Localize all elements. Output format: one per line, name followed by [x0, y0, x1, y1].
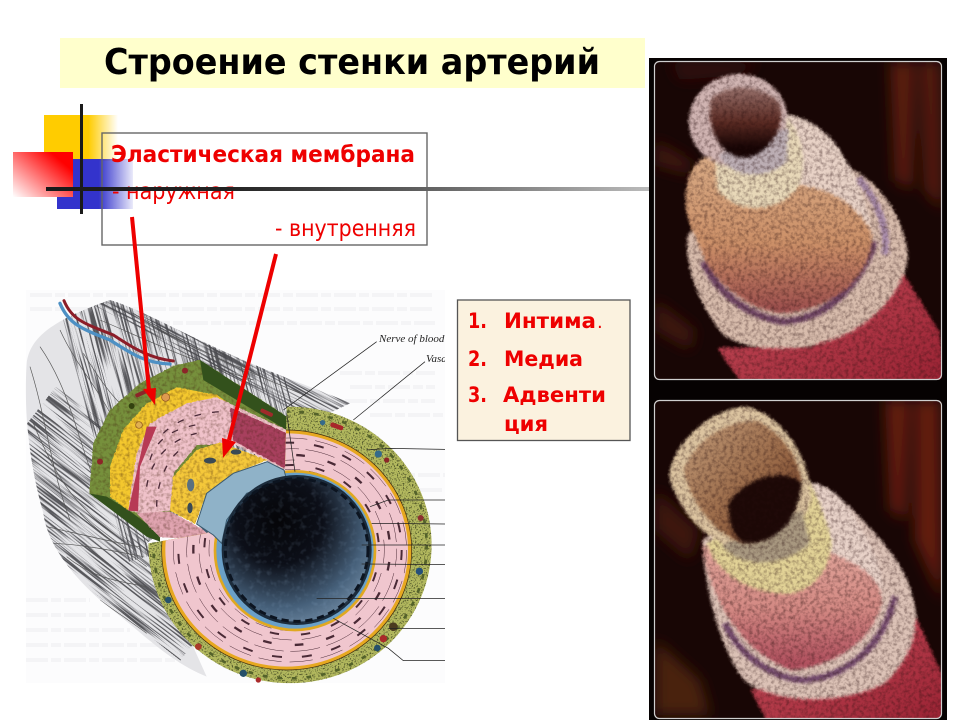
- diagram labels: Nerve of blood: [378, 333, 445, 345]
- intima base behind lumen: [197, 470, 300, 557]
- cut face of media: [137, 512, 211, 538]
- leader lines: [283, 342, 445, 661]
- arrow: inner membrane: [222, 254, 276, 458]
- faint scanned page background: [26, 290, 445, 683]
- diagram labels: Vasa: [426, 353, 447, 365]
- media: [165, 433, 408, 667]
- adventitia band: [703, 483, 915, 699]
- callout: elastic membrane: Эластическая мембрана: [111, 142, 415, 168]
- dark background: [654, 61, 942, 380]
- red outer vessel: [752, 617, 945, 720]
- legend: wall layers: 3.: [468, 383, 487, 407]
- front ring wedge: [147, 403, 437, 687]
- legend: wall layers: .: [597, 312, 603, 333]
- connective tissue fibres: [26, 300, 350, 676]
- small vessel: [60, 301, 173, 364]
- legend: wall layers: Медиа: [504, 347, 583, 371]
- lip: [670, 407, 812, 547]
- back ring: inner yellow membrane: [170, 443, 267, 524]
- legend: wall layers: Интима: [504, 309, 596, 333]
- lip: [686, 72, 790, 167]
- cream collar: [715, 115, 803, 208]
- back intima: [197, 462, 287, 543]
- lumen wall: [683, 421, 802, 544]
- media body: [686, 158, 872, 313]
- lumen: [728, 475, 802, 543]
- legend: wall layers: [458, 300, 630, 440]
- callout: elastic membrane: [102, 133, 427, 245]
- callout: elastic membrane: - внутренняя: [275, 216, 416, 242]
- artery cross-section diagram: [26, 293, 445, 684]
- horizontal rule: [46, 187, 650, 191]
- outer elastic membrane: [162, 430, 412, 670]
- arrow: outer membrane: [132, 217, 156, 405]
- photo: artery, layers close together: [654, 61, 943, 382]
- yellow collar: [707, 483, 832, 594]
- callout: elastic membrane: - наружная: [112, 179, 235, 205]
- back ring: pink media: [128, 397, 287, 514]
- adventitia band: [688, 155, 907, 348]
- lumen: [223, 477, 370, 623]
- legend: wall layers: 2.: [468, 347, 487, 371]
- adventitia: [147, 403, 437, 687]
- lumen: [710, 87, 781, 158]
- diagram labels: [378, 334, 445, 362]
- legend: wall layers: 1.: [468, 309, 487, 333]
- dark background: [654, 400, 942, 718]
- back ring: yellow membrane: [110, 387, 233, 511]
- pale shoulder: [812, 483, 882, 590]
- pale shoulder: [785, 115, 872, 232]
- back ring: outer green layer: [89, 360, 287, 542]
- photo panel backing: [649, 58, 947, 720]
- red outer vessel: [716, 274, 942, 380]
- legend: wall layers: ция: [504, 412, 548, 436]
- photo: artery, layers pulled apart: [654, 400, 945, 720]
- adventitia vessels: [97, 368, 424, 683]
- internal elastic membrane: [215, 471, 375, 630]
- legend: wall layers: Адвенти: [503, 383, 606, 407]
- decorative squares: [13, 104, 133, 214]
- title band: Строение стенки артерий: [104, 42, 600, 83]
- media body: [703, 530, 882, 670]
